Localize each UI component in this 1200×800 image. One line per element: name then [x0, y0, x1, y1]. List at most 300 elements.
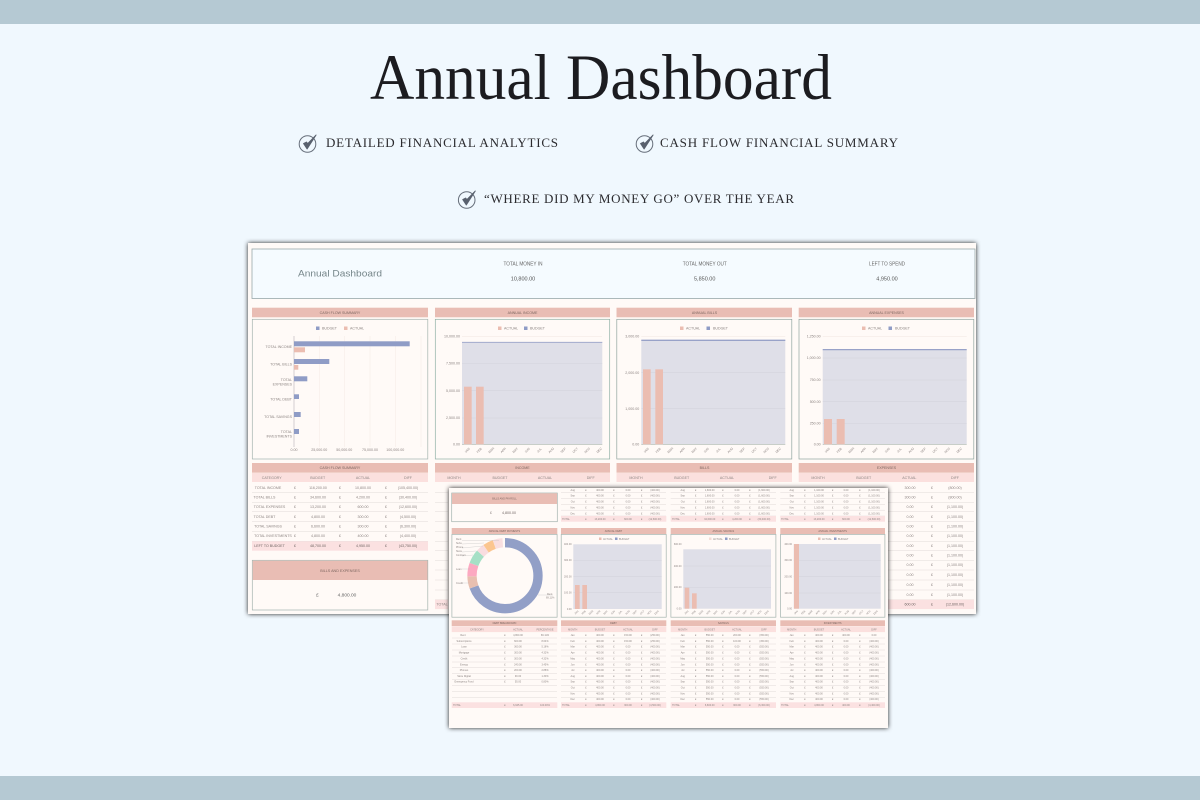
table fragment: annual savings: 1,600.00: [705, 495, 715, 498]
panel: annual income chart: 5,000.00: [446, 389, 460, 393]
table: cash flow summary: 13,200.00: [310, 505, 326, 509]
panel: annual savings chart: BUDGET: [729, 538, 740, 541]
table fragment: annual debt: 400.00: [596, 495, 604, 498]
table: investments by month: 400.00: [815, 640, 823, 643]
header summary box: TOTAL MONEY OUT: [683, 262, 727, 268]
panel: annual income chart: ACTUAL: [504, 327, 518, 331]
table: savings by month: Apr: [681, 652, 685, 655]
table fragment: annual savings: Aug: [680, 489, 686, 492]
panel: annual income chart: JUN: [524, 447, 531, 454]
table fragment: annual savings: £: [722, 501, 724, 504]
table fragment: annual debt: Oct: [571, 501, 575, 504]
table fragment: annual debt: £: [585, 506, 587, 509]
panel: annual income chart: 7,500.00: [446, 362, 460, 366]
table: expenses: [799, 463, 974, 609]
table: investments by month: Oct: [790, 686, 794, 690]
table: cash flow summary: CATEGORY: [262, 476, 282, 480]
panel: cash flow summary chart: TOTAL INCOME: [266, 345, 293, 349]
table: savings by month: £: [749, 675, 751, 678]
table: savings by month: 0.00: [735, 646, 740, 649]
table: expenses: (800.00): [948, 496, 962, 500]
table fragment: annual savings: (1,600.00): [758, 501, 770, 504]
table: debt breakdown: 300.00: [514, 652, 522, 655]
table fragment: annual investments: £: [832, 489, 834, 492]
table: cash flow summary: £: [385, 486, 387, 490]
table: investments by month: Jun: [790, 663, 794, 666]
table: cash flow summary: £: [339, 524, 341, 528]
table: debt by month: 0.00: [626, 646, 631, 649]
table: savings by month: 0.00: [735, 663, 740, 666]
table: investments by month: (400.00): [869, 663, 879, 666]
table: investments by month: 400.00: [842, 634, 850, 637]
table: investments by month: (400.00): [869, 652, 879, 655]
panel: annual debt chart: FEB: [581, 610, 587, 615]
table fragment: annual investments: 13,200.00: [813, 518, 825, 521]
table: investments by month: £: [859, 681, 861, 684]
table: savings by month: £: [722, 658, 724, 661]
table: income: DIFF: [587, 476, 595, 480]
panel: annual investments chart: APR: [815, 610, 821, 616]
table: debt by month: 0.00: [626, 692, 631, 695]
table: savings by month: TOTAL: [672, 704, 681, 707]
table: expenses: £: [931, 515, 933, 519]
table: investments by month: £: [859, 704, 861, 707]
table fragment: annual debt: £: [585, 495, 587, 498]
table: investments by month: £: [832, 652, 834, 655]
table: savings by month: £: [695, 634, 697, 637]
table: savings by month: Jul: [681, 669, 685, 672]
panel: annual expenses chart: JUL: [896, 447, 903, 454]
panel: annual debt chart: SEP: [632, 610, 638, 615]
panel: annual expenses chart: JUN: [884, 447, 891, 454]
table: investments by month: 400.00: [815, 669, 823, 672]
panel: annual savings chart: DEC: [764, 610, 770, 616]
panel: annual expenses chart: APR: [860, 446, 867, 454]
table: debt breakdown: Phones: [460, 669, 469, 672]
panel: annual bills chart: JAN: [643, 447, 650, 454]
table: debt by month: 400.00: [596, 658, 604, 661]
table fragment: annual savings: 0.00: [735, 512, 740, 515]
table: investments by month: £: [804, 652, 806, 655]
table: debt by month: 400.00: [596, 686, 604, 690]
table: investments by month: £: [832, 704, 834, 707]
table: debt by month: 0.00: [626, 658, 631, 661]
table: savings by month: 6,600.00: [705, 704, 715, 707]
table: cash flow summary: 4,200.00: [356, 496, 370, 500]
table: investments by month: £: [804, 646, 806, 649]
table: cash flow summary: 300.00: [358, 524, 368, 528]
panel: annual income chart: NOV: [584, 446, 592, 454]
table: debt by month: £: [641, 681, 643, 684]
table: debt by month: £: [641, 634, 643, 637]
table: investments by month: £: [832, 663, 834, 666]
table: debt by month: £: [641, 669, 643, 672]
table: debt by month: £: [585, 681, 587, 684]
table: savings by month: £: [695, 652, 697, 655]
table: investments by month: 400.00: [815, 663, 823, 666]
table: bills: [616, 463, 792, 482]
table: savings by month: £: [722, 686, 724, 690]
table: debt by month: (250.00): [650, 640, 660, 643]
table: cash flow summary: £: [385, 496, 387, 500]
table fragment: annual debt: (12,600.00): [649, 518, 662, 521]
table: cash flow summary: 4,950.00: [356, 544, 370, 548]
table: investments by month: (400.00): [869, 681, 879, 684]
table: savings by month: (350.00): [759, 634, 769, 637]
table fragment: annual savings: TOTAL: [672, 518, 681, 521]
table fragment: annual debt: 600.00: [624, 518, 632, 521]
table fragment: annual savings: (30,400.00): [758, 518, 771, 521]
table fragment: annual debt: 13,200.00: [594, 518, 606, 521]
table: investments by month: (400.00): [869, 698, 879, 701]
table: debt by month: ACTUAL: [623, 628, 634, 631]
table fragment: annual savings: £: [722, 518, 724, 521]
table: debt by month: TOTAL: [562, 704, 571, 707]
panel: cash flow summary chart: CASH FLOW SUMMARY: [320, 311, 361, 315]
panel: annual savings chart: JUN: [720, 610, 726, 615]
table: debt breakdown: 200.00: [514, 669, 522, 672]
panel: annual savings chart: MAY: [713, 610, 719, 616]
table: savings by month: £: [695, 675, 697, 678]
table fragment: annual investments: £: [804, 512, 806, 515]
table fragment: annual debt: £: [641, 489, 643, 492]
table: savings by month: 550.00: [706, 658, 714, 661]
table: debt breakdown: [452, 620, 557, 708]
table fragment: annual investments: TOTAL: [781, 518, 790, 521]
panel: annual investments chart: 300.00: [784, 559, 793, 562]
table fragment: annual savings: 0.00: [735, 495, 740, 498]
table: savings by month: 0.00: [735, 686, 740, 690]
table: expenses: 0.00: [906, 515, 914, 519]
table fragment: annual savings: £: [722, 489, 724, 492]
table: investments by month: DIFF: [871, 628, 877, 631]
table: debt by month: Sep: [570, 681, 576, 684]
table: debt breakdown: 3.45%: [541, 663, 549, 666]
panel: annual income chart: MAR: [487, 446, 496, 454]
table: debt by month: 400.00: [596, 692, 604, 695]
header summary box: Annual Dashboard: [298, 268, 382, 278]
table fragment: annual investments: Oct: [790, 501, 794, 504]
card: bills and payroll: £: [490, 511, 492, 515]
table fragment: annual debt: (400.00): [650, 512, 660, 515]
panel: annual income chart: SEP: [560, 447, 567, 454]
table: investments by month: £: [804, 640, 806, 643]
table: expenses: £: [931, 524, 933, 528]
table fragment: annual investments: £: [804, 518, 806, 521]
table: savings by month: BUDGET: [704, 628, 715, 631]
table: debt by month: (4,500.00): [649, 704, 661, 707]
table: debt breakdown: Subscriptions: [456, 640, 472, 643]
table: savings by month: Jun: [681, 663, 685, 666]
table: savings by month: Jan: [681, 634, 685, 637]
panel: cash flow summary chart: TOTAL: [281, 430, 292, 434]
table: savings by month: 0.00: [735, 658, 740, 661]
table fragment: annual savings: 34,600.00: [704, 518, 716, 521]
table fragment: annual savings: Oct: [681, 501, 685, 504]
table: expenses: (1,100.00): [947, 593, 963, 597]
table: expenses: (1,100.00): [947, 573, 963, 577]
panel: annual expenses chart: NOV: [944, 446, 952, 454]
panel: annual bills chart: ACTUAL: [686, 327, 700, 331]
table: debt by month: BUDGET: [595, 628, 606, 631]
panel: front dashboard screenshot: [449, 488, 888, 728]
table: debt breakdown: Emergency Fund: [454, 681, 474, 684]
table: investments by month: Jan: [790, 634, 794, 637]
table: debt by month: Dec: [570, 698, 576, 701]
table: investments by month: 400.00: [815, 634, 823, 637]
table: debt by month: £: [613, 658, 615, 661]
table: debt breakdown: 90.00: [515, 675, 522, 678]
panel: annual debt chart: ACTUAL: [603, 538, 613, 541]
table: expenses: (12,600.00): [946, 603, 964, 607]
table: cash flow summary: £: [385, 505, 387, 509]
table: investments by month: Aug: [789, 675, 795, 678]
panel: annual investments chart: ANNUAL INVESTMENTS: [818, 530, 847, 533]
table: investments by month: £: [804, 681, 806, 684]
table: savings by month: 0.00: [735, 652, 740, 655]
table fragment: annual savings: 0.00: [735, 501, 740, 504]
panel: annual debt chart: JUL: [618, 610, 624, 615]
panel: annual bills chart: 2,000.00: [625, 371, 639, 375]
feature: detailed financial analytics: DETAILED FINANCIAL ANALYTICS: [326, 135, 558, 150]
table fragment: annual savings: 4,200.00: [732, 518, 742, 521]
table: savings by month: (450.00): [759, 640, 769, 643]
table fragment: annual savings: (1,600.00): [758, 506, 770, 509]
panel: cash flow summary chart: ACTUAL: [350, 327, 364, 331]
table fragment: annual debt: 0.00: [626, 506, 631, 509]
table fragment: annual debt: £: [641, 495, 643, 498]
table fragment: annual debt: £: [613, 495, 615, 498]
table: savings by month: £: [722, 669, 724, 672]
table: debt breakdown: £: [504, 669, 506, 672]
panel: annual expenses chart: 1,000.00: [807, 356, 821, 360]
panel: annual investments chart: JUN: [830, 610, 835, 615]
table: investments by month: (400.00): [869, 692, 879, 695]
panel: cash flow summary chart: EXPENSES: [273, 382, 293, 386]
table: savings by month: £: [695, 640, 697, 643]
table fragment: annual debt: Aug: [570, 489, 576, 492]
table: investments by month: £: [832, 640, 834, 643]
table fragment: annual savings: Nov: [680, 506, 686, 509]
table fragment: annual investments: 1,100.00: [814, 501, 824, 504]
table: debt by month: £: [641, 704, 643, 707]
table fragment: annual investments: 0.00: [844, 501, 849, 504]
table: expenses: £: [931, 544, 933, 548]
table: savings by month: £: [722, 692, 724, 695]
feature: cash flow financial summary: CASH FLOW FINANCIAL SUMMARY: [660, 135, 899, 150]
card: bills and expenses: [252, 560, 428, 610]
panel: annual debt chart: 400.00: [564, 543, 572, 546]
table: cash flow summary: £: [294, 534, 296, 538]
panel: annual bills chart: 1,000.00: [625, 407, 639, 411]
header summary box: 4,950.00: [876, 276, 898, 282]
table: investments by month: £: [804, 698, 806, 701]
table fragment: annual debt: £: [641, 512, 643, 515]
panel: cash flow summary chart: [252, 308, 428, 459]
panel: annual debt chart: APR: [596, 610, 602, 616]
panel: annual savings chart: OCT: [749, 609, 756, 616]
table: savings by month: £: [695, 704, 697, 707]
panel: annual expenses chart: DEC: [956, 446, 964, 454]
table: debt by month: 0.00: [626, 669, 631, 672]
table: debt breakdown: 4.32%: [541, 658, 549, 661]
panel: annual debt chart: 0.00: [567, 608, 572, 611]
table: savings by month: £: [722, 675, 724, 678]
table: debt by month: £: [641, 692, 643, 695]
table: debt breakdown: 600.00: [514, 640, 522, 643]
table: investments by month: 0.00: [844, 663, 849, 666]
panel: annual income chart: JAN: [464, 447, 471, 454]
panel: annual expenses chart: OCT: [932, 446, 939, 454]
table: savings by month: £: [722, 640, 724, 643]
table: cash flow summary: DIFF: [404, 476, 413, 480]
table: debt by month: £: [585, 646, 587, 649]
table fragment: annual savings: £: [749, 518, 751, 521]
table: savings by month: Aug: [680, 675, 686, 678]
table: investments by month: Sep: [789, 681, 795, 684]
panel: annual bills chart: JUN: [703, 447, 710, 454]
panel: annual savings chart: FEB: [691, 610, 697, 615]
table: debt breakdown: £: [504, 658, 506, 661]
table: debt breakdown: 360.00: [514, 646, 522, 649]
table: debt breakdown: Loan: [461, 646, 467, 649]
panel: annual income chart: [435, 308, 610, 459]
panel: annual investments chart: AUG: [844, 610, 850, 616]
table: expenses: 300.00: [904, 496, 916, 500]
table fragment: annual investments: (1,100.00): [868, 495, 880, 498]
table: savings by month: £: [695, 658, 697, 661]
table: cash flow summary: £: [294, 544, 296, 548]
panel: annual bills chart: 3,000.00: [625, 334, 639, 338]
panel: annual income chart: DEC: [596, 446, 604, 454]
table: investments by month: £: [804, 663, 806, 666]
table: savings by month: 550.00: [706, 634, 714, 637]
panel: cash flow summary chart: TOTAL DEBT: [270, 398, 293, 402]
table: investments by month: £: [832, 686, 834, 690]
panel: annual expenses chart: JAN: [824, 447, 831, 454]
panel: annual debt chart: ANNUAL DEBT: [605, 530, 623, 533]
card: bills and expenses: £: [316, 592, 319, 598]
panel: annual expenses chart: 1,250.00: [807, 334, 821, 338]
table: investments by month: 0.00: [844, 646, 849, 649]
table: savings by month: £: [722, 681, 724, 684]
table: debt by month: £: [641, 686, 643, 690]
panel: annual bills chart: NOV: [763, 446, 771, 454]
table: savings by month: £: [695, 646, 697, 649]
table fragment: annual savings: £: [695, 518, 697, 521]
panel: annual income chart: MAY: [512, 447, 519, 454]
table fragment: annual debt: Sep: [570, 495, 576, 498]
table: expenses: 0.00: [906, 563, 914, 567]
table fragment: annual debt: £: [613, 489, 615, 492]
table: investments by month: £: [832, 692, 834, 695]
header summary box: LEFT TO SPEND: [869, 262, 905, 268]
table fragment: annual investments: Aug: [789, 489, 795, 492]
table: savings by month: 0.00: [735, 698, 740, 701]
table: debt breakdown: 240.00: [514, 663, 522, 666]
table: investments by month: 400.00: [815, 681, 823, 684]
table: debt by month: (400.00): [650, 652, 660, 655]
panel: annual investments chart: 400.00: [784, 543, 793, 546]
table: debt by month: £: [613, 698, 615, 701]
table: debt by month: 0.00: [626, 686, 631, 690]
panel: annual savings chart: AUG: [735, 610, 741, 616]
table: debt by month: (400.00): [650, 658, 660, 661]
table: cash flow summary: TOTAL INCOME: [255, 486, 282, 490]
table fragment: annual investments: (1,100.00): [868, 506, 880, 509]
table fragment: annual savings: 1,600.00: [705, 512, 715, 515]
panel: annual debt chart: MAY: [603, 610, 609, 616]
table: investments by month: £: [804, 686, 806, 690]
table fragment: annual investments: £: [859, 506, 861, 509]
table: debt by month: £: [613, 704, 615, 707]
panel: cash flow summary chart: 75,000.00: [362, 448, 378, 452]
table: savings by month: 550.00: [706, 698, 714, 701]
table fragment: annual savings: (1,600.00): [758, 495, 770, 498]
table: debt by month: [561, 620, 666, 708]
table: investments by month: £: [832, 658, 834, 661]
panel: annual investments chart: MAY: [822, 610, 828, 616]
table: debt by month: 400.00: [596, 681, 604, 684]
table fragment: annual savings: £: [695, 489, 697, 492]
table: bills: BUDGET: [674, 476, 690, 480]
table: investments by month: 400.00: [815, 675, 823, 678]
card: bills and payroll: 4,800.00: [502, 511, 516, 515]
table: investments by month: Dec: [789, 698, 795, 701]
table: debt breakdown: Rent: [460, 634, 466, 637]
table: investments by month: 400.00: [815, 692, 823, 695]
table fragment: annual savings: £: [749, 501, 751, 504]
table fragment: annual investments: £: [804, 506, 806, 509]
table: debt breakdown: 1.30%: [541, 675, 549, 678]
table: debt by month: May: [570, 658, 576, 661]
table: savings by month: £: [722, 634, 724, 637]
table: expenses: 600.00: [904, 603, 916, 607]
panel: annual savings chart: NOV: [757, 609, 763, 616]
header summary box: 10,800.00: [511, 276, 535, 282]
panel: annual investments chart: NOV: [866, 609, 872, 616]
header summary box: TOTAL MONEY IN: [504, 262, 543, 268]
table: expenses: (1,100.00): [947, 524, 963, 528]
table: savings by month: (550.00): [759, 652, 769, 655]
table: savings by month: Mar: [681, 646, 685, 649]
table: debt by month: 400.00: [596, 652, 604, 655]
table fragment: annual savings: £: [749, 512, 751, 515]
panel: annual debt chart: DEC: [654, 610, 660, 616]
table: savings by month: £: [695, 681, 697, 684]
panel: annual bills chart: MAR: [666, 446, 675, 454]
panel: annual debt donut chart: Phone: [456, 546, 464, 549]
table fragment: annual investments: £: [859, 501, 861, 504]
panel: annual investments chart: MAR: [808, 609, 814, 616]
table: expenses: £: [931, 534, 933, 538]
table: debt breakdown: £: [504, 675, 506, 678]
table: debt by month: £: [613, 686, 615, 690]
table fragment: annual savings: £: [695, 512, 697, 515]
table: savings by month: £: [695, 692, 697, 695]
table fragment: annual savings: 1,600.00: [705, 506, 715, 509]
table: debt by month: Mar: [571, 646, 575, 649]
table: debt breakdown: ACTUAL: [513, 628, 524, 631]
table: savings by month: (550.00): [759, 675, 769, 678]
table: investments by month: Apr: [790, 652, 794, 655]
table fragment: annual investments: 0.00: [844, 512, 849, 515]
table fragment: annual debt: £: [585, 518, 587, 521]
table: cash flow summary: £: [339, 486, 341, 490]
table: debt breakdown: £: [504, 634, 506, 637]
panel: annual savings chart: APR: [706, 610, 712, 616]
table fragment: annual savings: £: [695, 506, 697, 509]
